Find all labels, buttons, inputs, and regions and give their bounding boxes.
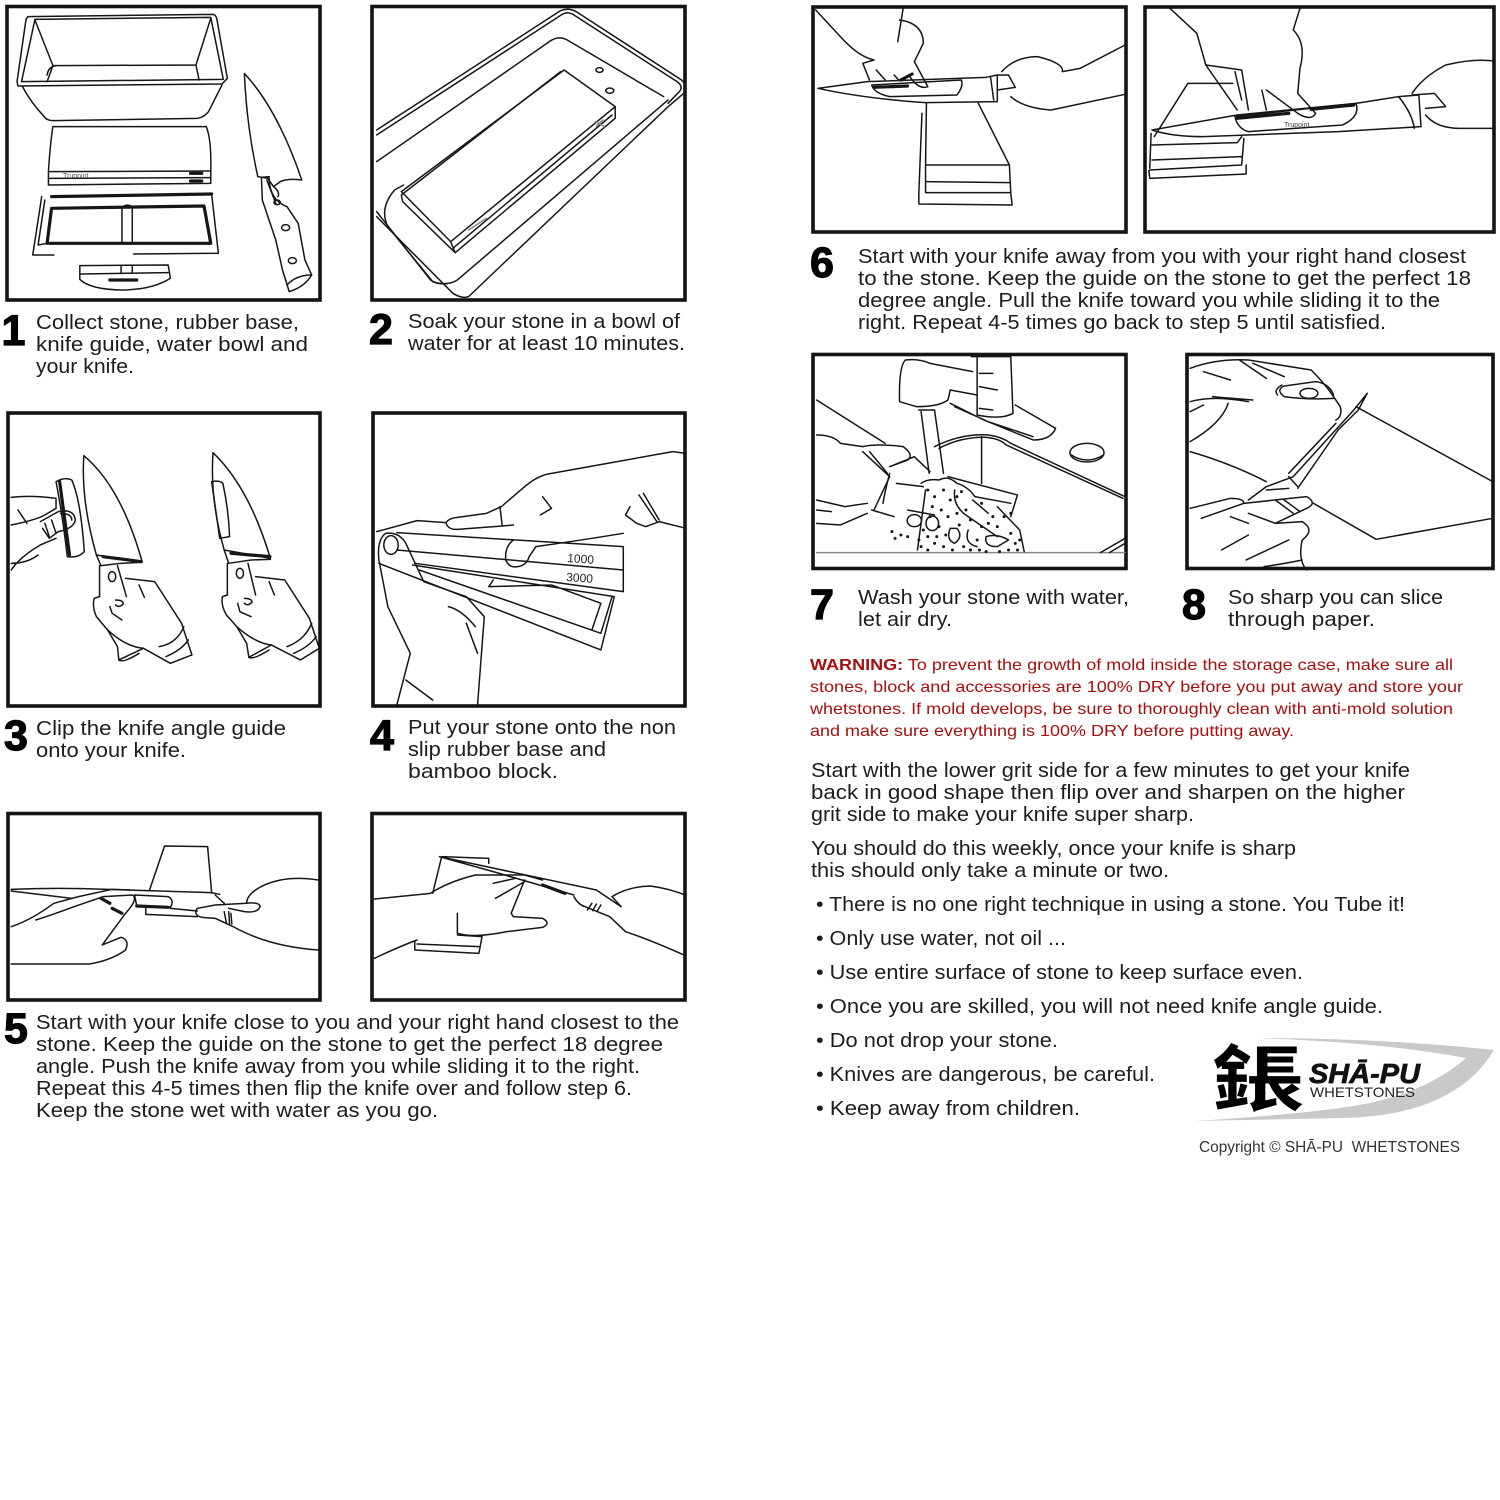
illustration: close-up of guide on knife over stone	[1149, 8, 1495, 178]
step 5 description: Keep the stone wet with water as you go.	[36, 1099, 438, 1122]
step 8 description: So sharp you can slice	[1228, 586, 1443, 609]
frame	[8, 814, 320, 1000]
paragraph: grit advice: back in good shape then flip over and sharpen on the higher	[811, 781, 1405, 804]
number 3: 3	[4, 712, 28, 760]
step 6 description: right. Repeat 4-5 times go back to step 5 until satisfied.	[858, 311, 1386, 334]
step 6 description: degree angle. Pull the knife toward you while sliding it to the	[858, 289, 1440, 312]
logo: SHĀ-PU whetstones	[1193, 1021, 1494, 1126]
step 2 description: water for at least 10 minutes.	[407, 332, 685, 355]
grit label 3000: 3000	[566, 570, 594, 586]
grit label 1000: 1000	[567, 551, 595, 567]
step 2 number and text	[369, 306, 685, 355]
illustration: bowl, stone, base, guide and knife	[17, 14, 312, 292]
step 5 description: angle. Push the knife away from you while sliding it to the right.	[36, 1055, 640, 1078]
illustration: knife sliding across stone	[374, 857, 685, 958]
number 1: 1	[2, 307, 25, 355]
step 3 number and text	[4, 712, 286, 762]
warning text block: WARNING: To prevent the growth of mold inside the storage case, make sure all	[810, 657, 1453, 674]
panel: step 3 clip guide	[8, 413, 320, 706]
number 2: 2	[369, 306, 393, 354]
panel: step 2 soak stone	[372, 6, 686, 300]
step 3 description	[36, 717, 286, 762]
logo kanji: 鋹	[1212, 1021, 1304, 1126]
step 3 description: Clip the knife angle guide	[36, 717, 286, 740]
paragraph: grit advice: grit side to make your knife super sharp.	[811, 803, 1194, 826]
warning text block	[809, 657, 1464, 740]
illustration: pushing the knife away, viewed from the side	[11, 846, 318, 964]
step 1 description: knife guide, water bowl and	[36, 333, 308, 356]
step 6 number and text	[810, 239, 1471, 334]
frame	[813, 354, 1126, 568]
panel: step 6 right close-up	[1145, 7, 1495, 232]
step 3 description: onto your knife.	[36, 739, 186, 762]
step 6 description: Start with your knife away from you with your right hand closest	[858, 245, 1466, 268]
step 5 description: stone. Keep the guide on the stone to get the perfect 18 degree	[36, 1033, 663, 1056]
warning text block: whetstones. If mold develops, be sure to thoroughly clean with anti-mold solution	[809, 701, 1453, 718]
illustration: clipping the guide onto the knife	[11, 453, 319, 663]
frame	[373, 413, 685, 706]
step 5 number and text	[4, 1005, 679, 1122]
paragraph: grit advice	[811, 759, 1410, 826]
frame	[7, 6, 320, 300]
step 6 description: to the stone. Keep the guide on the stone to get the perfect 18	[858, 267, 1471, 290]
bullet list of tips: • Knives are dangerous, be careful.	[816, 1063, 1155, 1086]
panel: step 5 left push knife	[8, 814, 320, 1000]
step 1 description: Collect stone, rubber base,	[36, 311, 299, 334]
logo swoosh blade	[1193, 1038, 1494, 1121]
illustration: knife slicing through paper	[1190, 360, 1493, 570]
panel: step 6 left pull knife	[813, 7, 1126, 232]
panel: step 1 collect items	[7, 6, 320, 300]
step 8 number and text	[1182, 581, 1443, 631]
panel: step 5 right return stroke	[372, 814, 685, 1000]
step 4 description: Put your stone onto the non	[408, 716, 676, 739]
number 5: 5	[4, 1005, 28, 1053]
number 4: 4	[370, 712, 394, 760]
number 8: 8	[1182, 581, 1206, 629]
copyright line: Copyright © SHĀ-PU WHETSTONES	[1199, 1138, 1460, 1156]
step 1 description: your knife.	[36, 355, 134, 378]
illustration: pulling the knife toward you, stone pointing away	[816, 8, 1125, 205]
logo wordmark: SHĀ-PU	[1309, 1058, 1421, 1089]
step 4 number and text	[370, 712, 676, 783]
number 6: 6	[810, 239, 834, 287]
step 7 description: Wash your stone with water,	[858, 586, 1129, 609]
panel: step 8 slice paper	[1187, 354, 1493, 570]
paragraph: frequency advice	[811, 837, 1296, 882]
paragraph: grit advice: Start with the lower grit side for a few minutes to get your knife	[811, 759, 1410, 782]
step 1 number and text	[2, 307, 308, 378]
step 4 description: slip rubber base and	[408, 738, 606, 761]
panel: step 4 place stone on base	[373, 413, 686, 706]
guide brand label: Trupoint	[1284, 122, 1309, 129]
paragraph: frequency advice: this should only take a minute or two.	[811, 859, 1169, 882]
frame	[1187, 354, 1493, 568]
step 2 description	[407, 310, 685, 355]
step 7 description: let air dry.	[858, 608, 952, 631]
frame	[372, 814, 685, 1000]
step 5 description	[36, 1011, 679, 1122]
step 8 description: through paper.	[1228, 608, 1375, 631]
warning text block: and make sure everything is 100% DRY before putting away.	[810, 723, 1294, 740]
frame	[813, 7, 1126, 232]
step 8 description	[1228, 586, 1443, 631]
paragraph: frequency advice: You should do this weekly, once your knife is sharp	[811, 837, 1296, 860]
illustration: stone soaking in a bowl	[377, 9, 686, 297]
logo subtitle: WHETSTONES	[1310, 1084, 1415, 1100]
warning text block: stones, block and accessories are 100% DRY before you put away and store your	[810, 679, 1464, 696]
step 4 description	[408, 716, 676, 783]
bullet list of tips: • Use entire surface of stone to keep surface even.	[816, 961, 1303, 984]
step 2 description: Soak your stone in a bowl of	[408, 310, 680, 333]
bullet list of tips: • Only use water, not oil ...	[816, 927, 1066, 950]
step 1 description	[36, 311, 308, 378]
bullet list of tips: • Once you are skilled, you will not need knife angle guide.	[816, 995, 1383, 1018]
bullet list of tips	[816, 893, 1405, 1120]
bullet list of tips: • Do not drop your stone.	[816, 1029, 1058, 1052]
step 5 description: Repeat this 4-5 times then flip the knife over and follow step 6.	[36, 1077, 632, 1100]
frame	[1145, 7, 1494, 232]
illustration: washing the stone under the tap	[817, 357, 1125, 553]
panel: step 7 wash stone	[813, 354, 1126, 568]
stone brand label: Trupoint	[63, 173, 88, 180]
step 7 number and text	[810, 581, 1129, 631]
step 6 description	[858, 245, 1471, 334]
bullet list of tips: • There is no one right technique in using a stone. You Tube it!	[816, 893, 1405, 916]
step 5 description: Start with your knife close to you and your right hand closest to the	[36, 1011, 679, 1034]
frame	[372, 6, 685, 300]
frame	[8, 413, 320, 706]
bullet list of tips: • Keep away from children.	[816, 1097, 1080, 1120]
step 7 description	[858, 586, 1129, 631]
illustration: hands placing stone onto base	[377, 452, 686, 705]
number 7: 7	[810, 581, 834, 629]
step 4 description: bamboo block.	[408, 760, 558, 783]
